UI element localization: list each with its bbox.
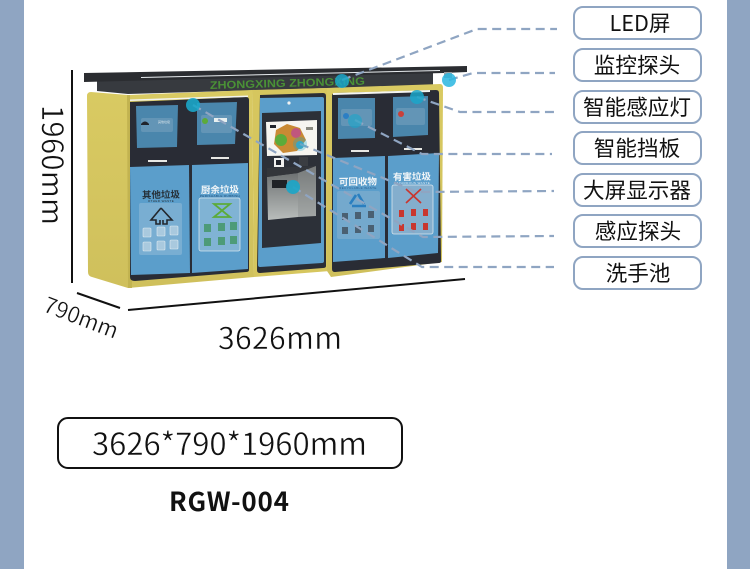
model number: RGW-004 [169,482,289,519]
QR code [274,158,284,167]
label: LED screen [574,7,701,39]
label: smart flap [574,132,701,164]
label: induction sensor: 感应探头 [595,215,681,246]
right module [327,84,443,277]
surveillance camera [444,72,452,78]
label: smart flap: 智能挡板 [594,132,680,163]
roof canopy [84,66,467,94]
overall size box: 3626*790*1960mm [92,419,367,464]
panel: hazardous waste: 有害垃圾 [393,169,432,183]
panel: hazardous waste [388,153,439,258]
flap screen: kitchen waste [197,102,237,145]
callout line: smart light [417,97,556,112]
label: smart induction light: 智能感应灯 [583,91,691,122]
callout line: smart flap [355,120,552,154]
flap screen: other waste: 其他垃圾 [158,119,170,124]
handles [351,150,369,152]
large display screen [266,120,317,156]
LED screen text: ZHONGXING ZHONGXING [210,76,365,92]
callout line: induction sensor [193,105,554,237]
flap screen: recyclables [338,98,375,139]
width dimension text: 3626mm [218,314,342,358]
label: wash basin: 洗手池 [606,257,670,288]
right side bar [727,0,750,569]
label: wash basin [574,257,701,289]
callout line: wash basin [293,187,554,267]
left side bar [0,0,24,569]
height dimension line [71,70,73,283]
panel: kitchen waste: PERISHABLE RUBBISH [200,194,240,198]
callout line: LED screen [342,29,557,80]
depth dimension text: 790mm [39,288,124,345]
height dimension text: 1960mm [33,105,75,225]
recycling station cabinet [84,66,467,288]
flap screen: hazardous [393,96,428,137]
label: LED screen: LED屏 [610,7,670,38]
handles [148,160,167,162]
callout line: surveillance camera [449,73,555,80]
panel: recyclables: RECYCLABLE WASTE [339,186,377,190]
panel: other waste [130,165,190,275]
panel: recyclables [333,156,385,262]
label: induction sensor [574,215,701,247]
label: surveillance camera: 监控探头 [594,49,680,80]
callout line: large display [300,144,554,192]
label: surveillance camera [574,49,701,81]
panel: other waste: 其他垃圾 [142,187,181,201]
centre module [252,88,330,277]
panel: kitchen waste [192,163,248,273]
panel: other waste: OTHER WASTE [148,199,174,203]
depth dimension line [77,293,120,308]
label: large display: 大屏显示器 [583,174,691,205]
panel: recyclables: 可回收物 [339,174,378,188]
flap screen: other waste [136,105,178,148]
hotspot markers [186,73,456,194]
hand washing sink [267,166,316,220]
panel: kitchen waste: 厨余垃圾 [201,182,240,196]
width dimension line [128,279,465,310]
control panel [262,111,321,248]
left module [87,90,254,288]
panel: hazardous waste: HAZARDOUS WASTE [394,181,430,185]
